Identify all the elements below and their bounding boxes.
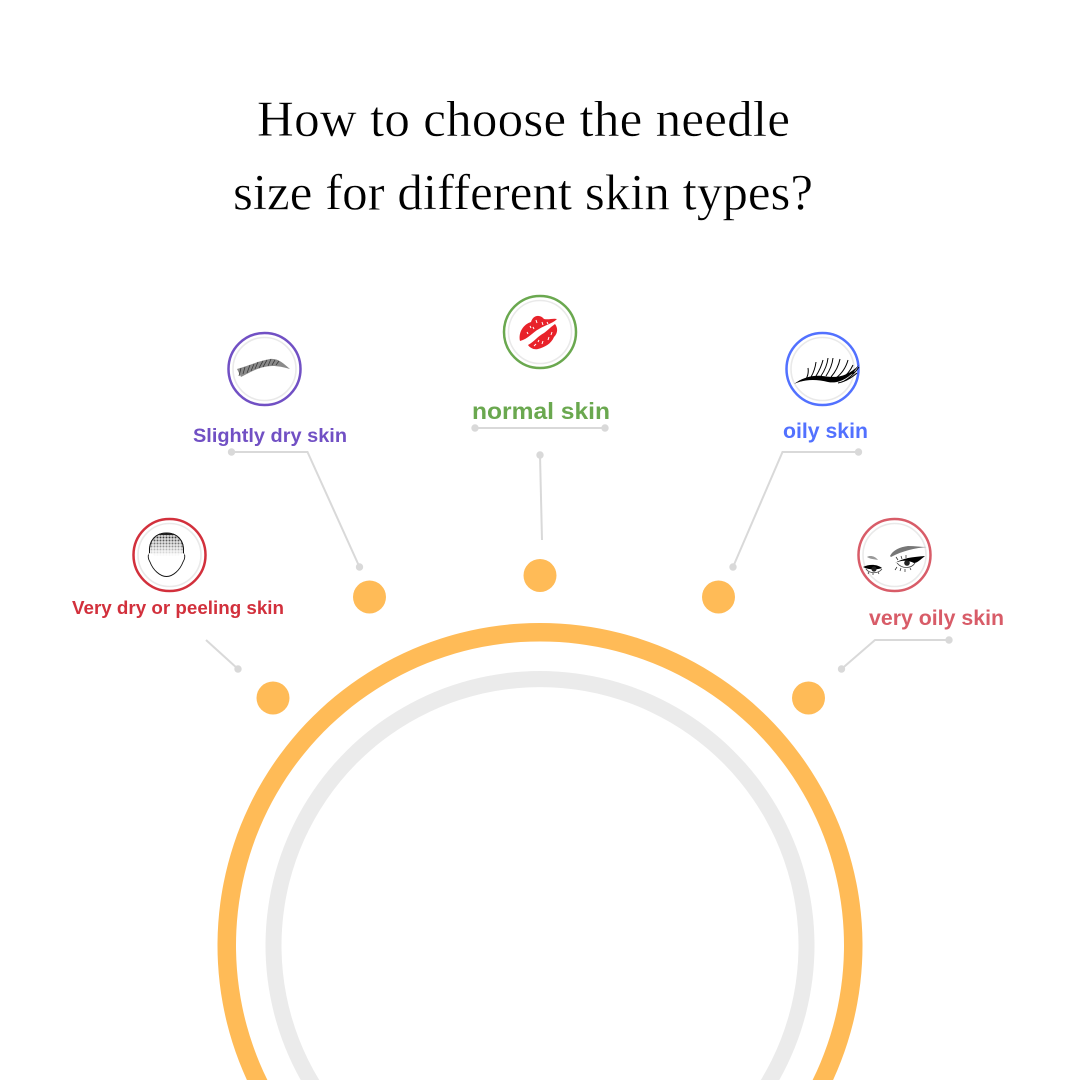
icon: head (very dry): [134, 519, 206, 591]
orange dot: very oily: [792, 682, 825, 714]
outer orange ring: [217, 623, 862, 1080]
icon: eyes (very oily): [858, 519, 930, 591]
title: size for different skin types?: [233, 166, 813, 222]
connector: slightly dry: [228, 448, 363, 571]
connector: very oily: [838, 636, 953, 673]
icon: lips (normal): [504, 296, 576, 368]
inner grey ring: [266, 671, 814, 1080]
label: very oily: very oily skin: [869, 607, 1004, 630]
title: [233, 92, 813, 222]
label: slightly dry: Slightly dry skin: [193, 425, 347, 447]
orange dot: very dry: [256, 682, 290, 714]
connector: normal label underline: [471, 424, 609, 432]
label: oily: oily skin: [783, 420, 868, 443]
icon: eyebrow (slightly dry): [228, 333, 300, 405]
orange dot: oily: [702, 580, 735, 614]
label: very dry: Very dry or peeling skin: [72, 597, 284, 618]
icon: eyelash (oily): [786, 333, 859, 405]
connector: oily: [729, 448, 862, 571]
connector: normal: [536, 451, 544, 540]
title: How to choose the needle: [257, 92, 790, 148]
connector: very dry: [206, 640, 242, 673]
orange dot: slightly dry: [353, 580, 386, 614]
label: normal: normal skin: [472, 398, 610, 424]
orange dot: normal: [524, 559, 556, 592]
